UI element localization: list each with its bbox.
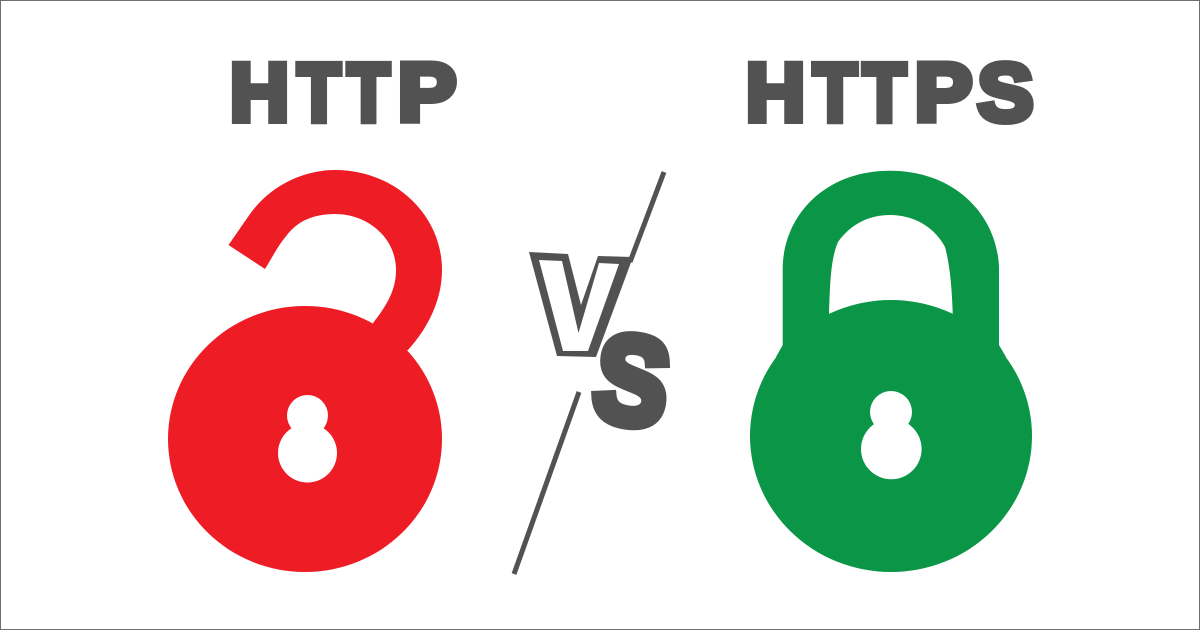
- icon: open red padlock: [168, 170, 442, 572]
- heading: HTTPS: H: [746, 48, 805, 138]
- heading: HTTPS: P: [915, 46, 972, 138]
- heading: HTTP: P: [398, 46, 456, 138]
- heading: HTTP: H: [230, 48, 289, 138]
- heading: HTTPS: T: [863, 47, 906, 139]
- heading: HTTP: T: [347, 47, 390, 139]
- heading: HTTP: T: [298, 47, 340, 139]
- letter S: S: [586, 306, 678, 454]
- icon: closed green padlock: [750, 171, 1032, 572]
- heading: HTTPS: T: [813, 47, 857, 139]
- divider slash: [514, 172, 664, 574]
- outlined letter V: [529, 252, 633, 357]
- heading: HTTPS: S: [978, 46, 1033, 138]
- heading: HTTP: [230, 46, 456, 139]
- heading: HTTPS: [746, 46, 1033, 139]
